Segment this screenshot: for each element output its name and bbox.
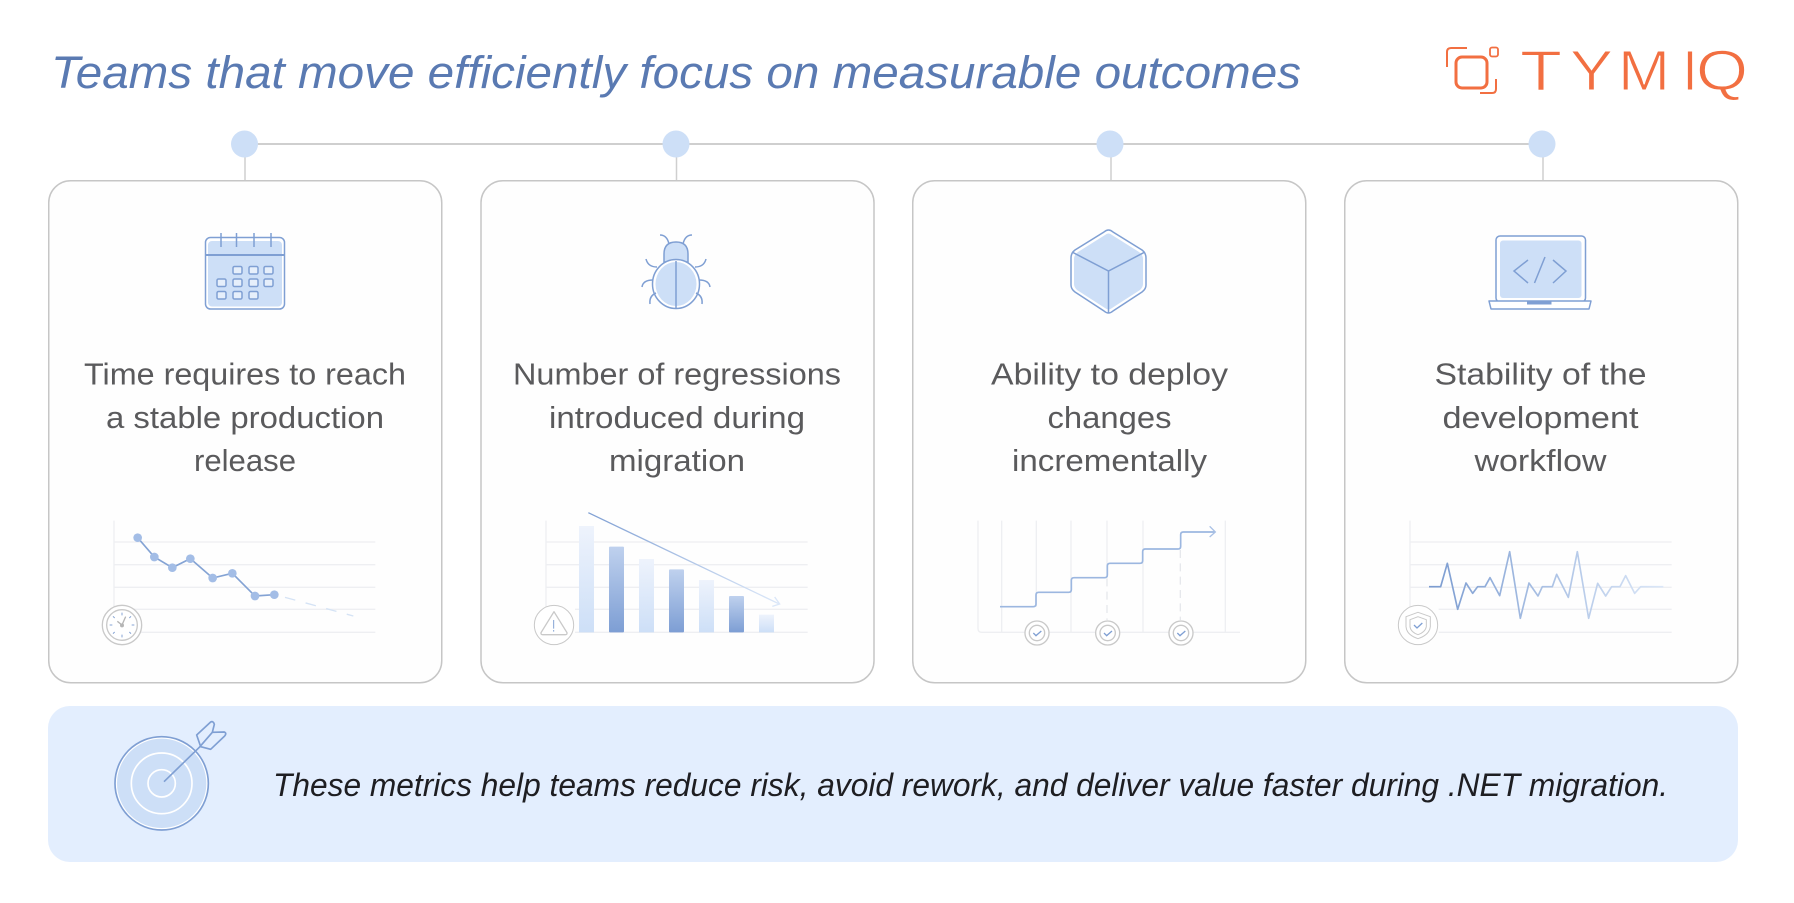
card text: workflow [1473,443,1607,478]
icon: cube [1071,230,1146,313]
card text: migration [609,443,745,478]
logo: TYMIQ: Y [1570,39,1613,103]
card text [513,356,841,478]
icon: laptop with code [1489,236,1591,309]
line chart: stability signal [1398,521,1672,645]
card text: Ability to deploy [991,356,1229,392]
panel: workflow stability [1345,181,1738,683]
panel: incremental deployment [913,181,1306,683]
step chart: incremental progress [978,521,1240,645]
logo: TYMIQ: Q [1696,39,1748,103]
card text: introduced during [549,400,805,435]
panel: time to stable release [49,181,442,683]
title: Teams that move efficiently focus on measurable outcomes [51,47,1301,98]
card text: Time requires to reach [84,356,406,392]
icon: bug [642,235,710,308]
logo: TYMIQ [1447,39,1748,103]
card text [991,356,1229,478]
icon: target with arrow [115,722,226,830]
card text: development [1442,400,1639,435]
logo: TYMIQ: M [1618,39,1670,103]
icon: clock badge [102,605,142,645]
logo: TYMIQ: I [1682,39,1698,103]
card text: Number of regressions [513,356,841,392]
card text: a stable production [106,400,384,435]
panel: regressions during migration [481,181,874,683]
card text [84,356,406,478]
bar chart: declining regressions [534,513,808,645]
icon: warning badge [534,605,574,645]
timeline connector [231,130,1556,181]
logo: TYMIQ: T [1520,39,1562,103]
callout text: These metrics help teams reduce risk, avoid rework, and deliver value faster during .NET migration. [273,767,1668,803]
card text: changes [1048,400,1172,435]
icon: calendar [206,233,284,309]
card text: incrementally [1012,443,1208,478]
callout banner [48,706,1738,862]
icon: shield badge [1398,605,1438,645]
line chart: downward trend [102,521,375,645]
card text: release [194,443,296,478]
icon: check badges [1025,621,1193,645]
card text [1434,356,1646,478]
card text: Stability of the [1434,356,1646,392]
